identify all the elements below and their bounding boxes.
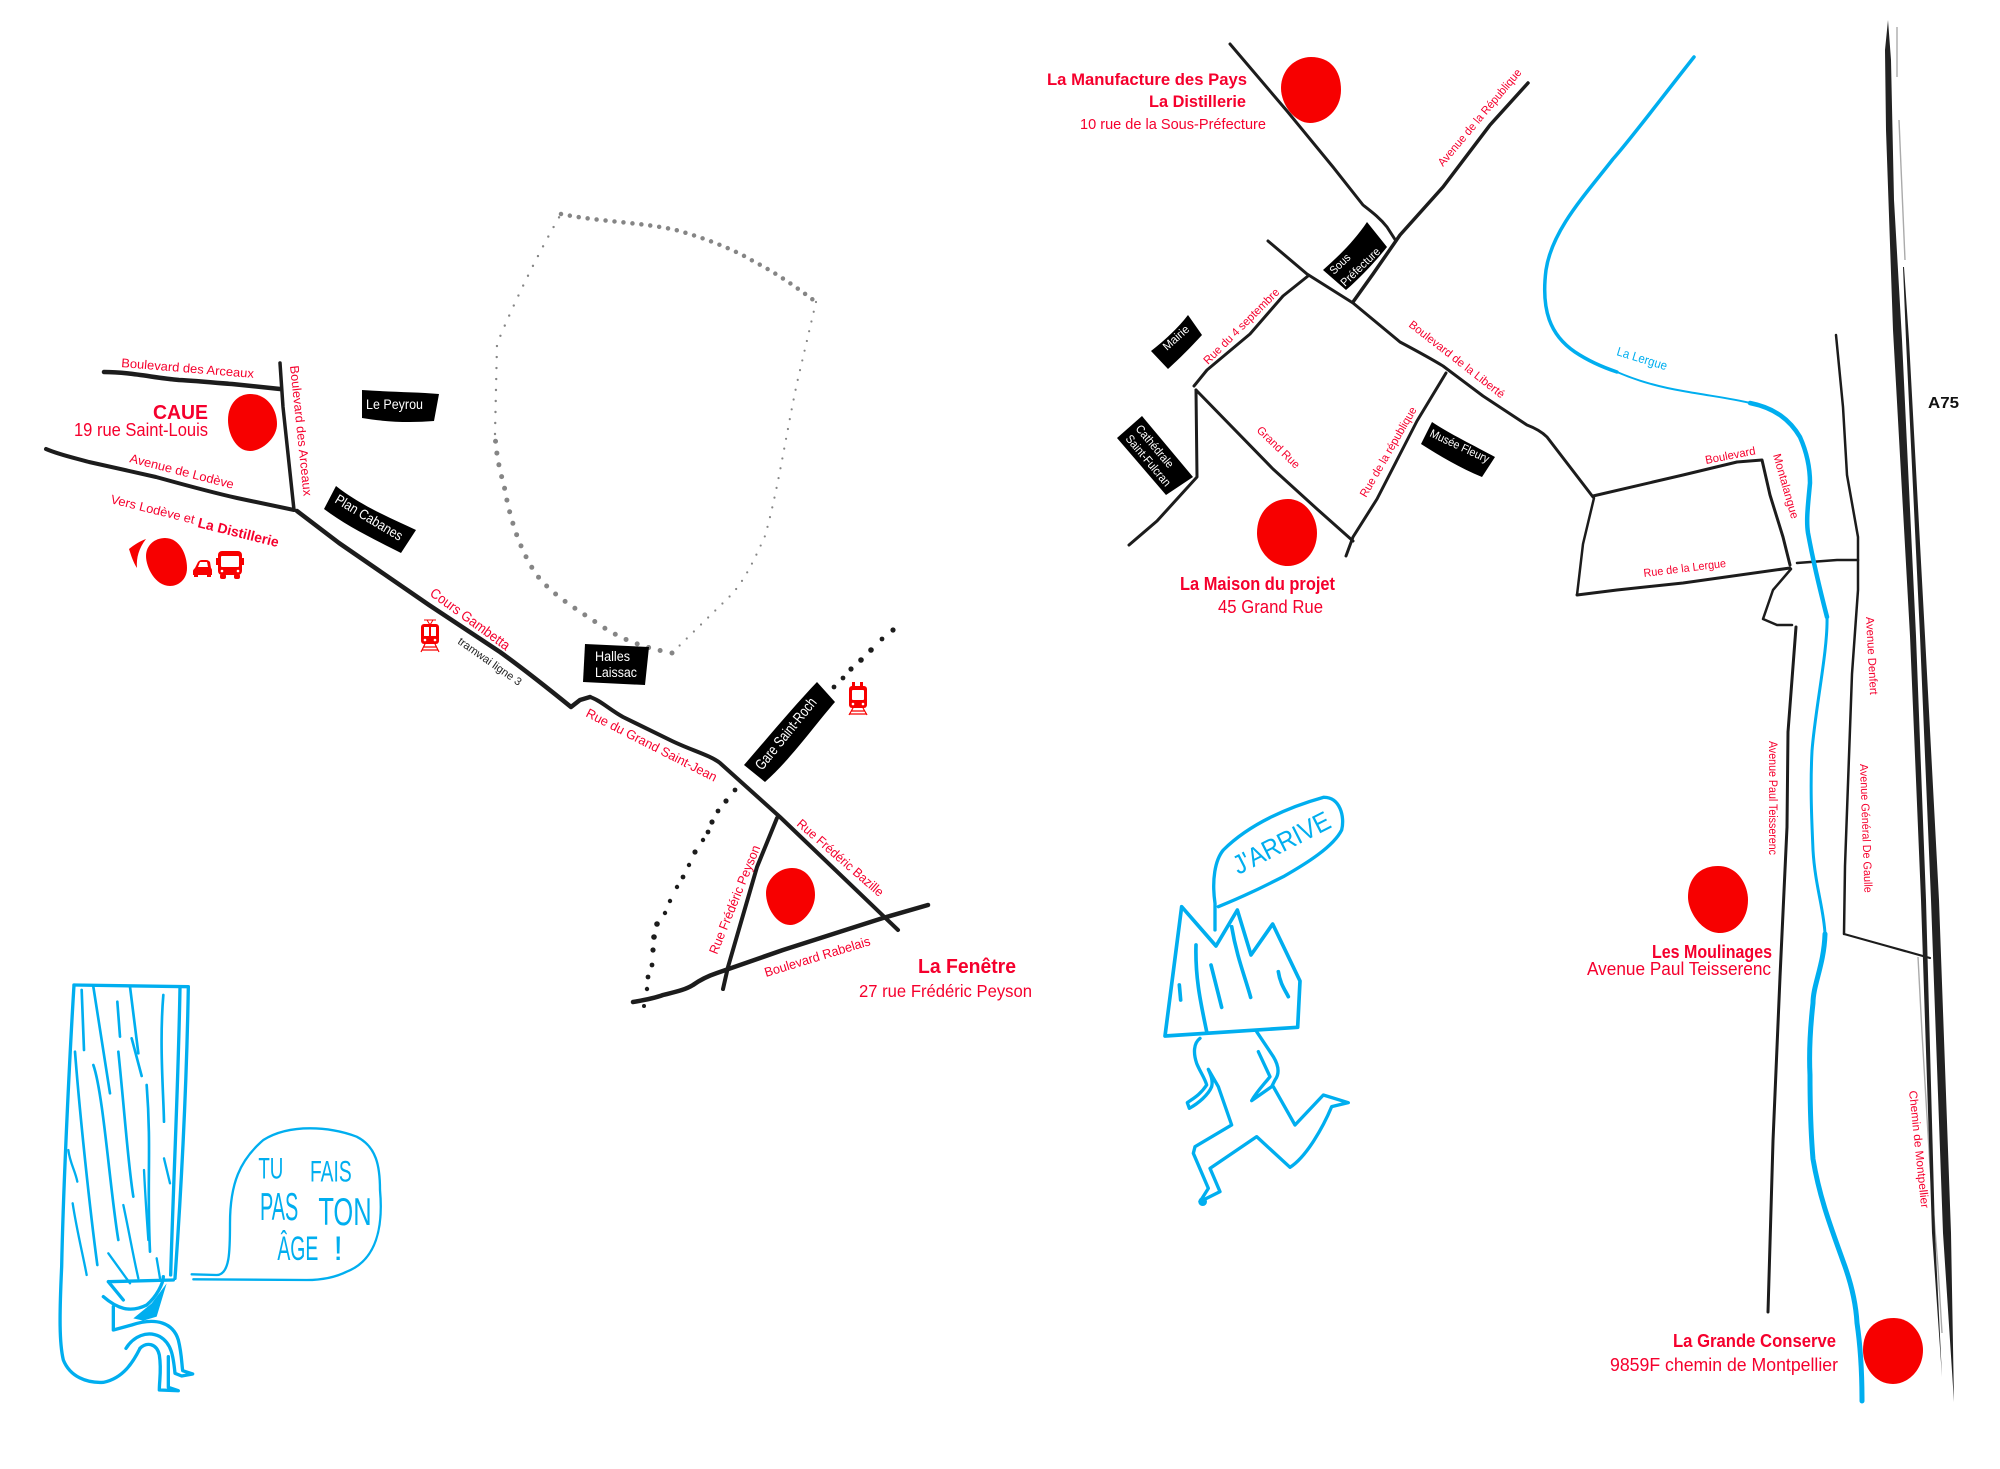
street names: La Distillerie [196, 514, 281, 550]
road: Boulevard Montalangue [1593, 460, 1790, 565]
building worn as a hat [1165, 907, 1300, 1036]
illustration: running figure [1165, 797, 1348, 1206]
motorway name: A75 [1928, 395, 1959, 412]
icon: bus [216, 551, 244, 579]
street names: Boulevard des Arceaux [287, 365, 315, 497]
road: Avenue Paul Teisserenc [1768, 627, 1796, 1312]
address: La Grande Conserve: 9859F chemin de Montpellier [1610, 1355, 1838, 1375]
river: La Lergue [1545, 57, 1862, 1401]
label: Cathédrale Saint-Fulcran [1117, 416, 1193, 495]
panel: map of Montpellier [46, 214, 1032, 1008]
road: A75 western carriageway [1885, 20, 1942, 1377]
street names: Boulevard des Arceaux [121, 356, 255, 381]
icon: car [193, 560, 212, 577]
street names: Boulevard de la Liberté [1406, 319, 1507, 401]
address: La Manufacture des Pays: La Distillerie [1149, 92, 1246, 111]
address: CAUE [74, 402, 208, 440]
street names: Avenue Denfert [1863, 617, 1879, 696]
street names: Rue de la Lergue [1643, 558, 1727, 580]
speech bubble [192, 1128, 381, 1280]
speech bubble [1214, 797, 1343, 930]
road: Boulevard Rabelais [633, 905, 928, 1002]
street names: Grand Rue [1254, 425, 1302, 471]
speech text: ÂGE [277, 1229, 318, 1268]
tram line note: tramwai ligne 3 [455, 636, 524, 688]
label: Gare Saint-Roch: Gare Saint-Roch [752, 694, 820, 774]
marker: La Fenêtre [766, 868, 815, 925]
road: Grand Rue [1196, 390, 1353, 541]
street names: Avenue Général De Gaulle [1857, 764, 1873, 893]
road: Rue de la république [1346, 373, 1446, 556]
street names: Avenue de la République [1436, 67, 1524, 169]
railway line south [642, 788, 737, 1008]
label: Sous-Préfecture: Sous [1328, 252, 1354, 277]
marker: La Distillerie [146, 538, 187, 586]
street names: Cours Gambetta [427, 584, 514, 653]
marker: direction arrow [129, 539, 146, 568]
road: Boulevard de la Liberté [1268, 241, 1593, 497]
road: Boulevard des Arceaux west [104, 372, 280, 389]
address: La Grande Conserve: La Grande Conserve [1673, 1331, 1836, 1351]
address: La Fenêtre: La Fenêtre [918, 956, 1016, 978]
address: Les Moulinages [1587, 942, 1772, 979]
street names: Boulevard Rabelais [762, 933, 873, 980]
street names: Avenue Paul Teisserenc [1766, 741, 1778, 855]
speech text: TU [258, 1152, 283, 1185]
railway line north [832, 627, 896, 689]
speech text: J'ARRIVE [1227, 805, 1336, 880]
address: CAUE: 19 rue Saint-Louis [74, 420, 208, 440]
speech text: TON [318, 1190, 372, 1234]
label: Halles Laissac: Laissac [595, 665, 637, 680]
street names [109, 356, 887, 980]
icon: tram, Gare Saint-Roch [849, 682, 867, 715]
road: Avenue Denfert [1836, 335, 1858, 934]
street names: Rue du Grand Saint-Jean [584, 705, 720, 785]
marker: CAUE [228, 394, 277, 451]
street names: Avenue de Lodève [128, 451, 235, 492]
road: A75 eastern carriageway [1903, 267, 1954, 1402]
road: Avenue de Lodève [46, 449, 294, 510]
label: Mairie: Mairie [1161, 324, 1192, 353]
road: Cours Gambetta [297, 511, 590, 707]
marker: Les Moulinages [1688, 866, 1748, 933]
marker: La Grande Conserve [1863, 1318, 1923, 1384]
speech text: PAS [260, 1185, 298, 1229]
label: Cathédrale Saint-Fulcran: Cathédrale [1133, 422, 1177, 471]
illustration: seated figure under a curtain [60, 985, 381, 1391]
label: Plan Cabanes: Plan Cabanes [332, 491, 406, 544]
label: Le Peyrou: Le Peyrou [366, 397, 423, 412]
street names: Rue Frédéric Peyson [706, 843, 763, 956]
label: Mairie [1151, 315, 1202, 369]
label: Halles Laissac [583, 644, 649, 685]
speech text: FAIS [310, 1156, 352, 1189]
foot [1198, 1197, 1207, 1206]
street names: Boulevard [1704, 445, 1757, 467]
address: La Manufacture des Pays [1047, 70, 1266, 133]
road: Rue du Grand Saint-Jean and Rue Frédéric Bazille [590, 697, 898, 930]
label: Musée Fleury [1421, 422, 1495, 477]
address: La Fenêtre: 27 rue Frédéric Peyson [859, 981, 1032, 1001]
road: Rue du 4 septembre [1194, 276, 1308, 386]
river name: La Lergue [1615, 344, 1669, 373]
road: link to Avenue Denfert [1797, 560, 1858, 563]
running body [1187, 1032, 1348, 1202]
address: La Maison du projet [1180, 574, 1335, 617]
street names: Rue du 4 septembre [1202, 287, 1282, 367]
road: link to Chemin de Montpellier [1844, 934, 1930, 958]
marker: La Manufacture des Pays [1281, 57, 1341, 123]
street names: Rue Frédéric Bazille [794, 816, 887, 899]
road: faint sketch lines [1897, 27, 1942, 1333]
address: La Manufacture des Pays: La Manufacture des Pays [1047, 70, 1247, 89]
address: La Grande Conserve [1610, 1331, 1838, 1375]
speech text: ! [333, 1230, 343, 1268]
address: Les Moulinages: Avenue Paul Teisserenc [1587, 959, 1771, 979]
street names: Montalangue [1770, 453, 1800, 520]
address: La Maison du projet: 45 Grand Rue [1218, 597, 1323, 617]
road: loop west [1577, 498, 1594, 595]
address: La Maison du projet: La Maison du projet [1180, 574, 1335, 594]
label: Sous-Préfecture [1323, 222, 1387, 290]
panel: map of Lodève [1047, 20, 1959, 1402]
road: Rue Frédéric Peyson [723, 818, 777, 989]
label: Sous-Préfecture: Préfecture [1339, 246, 1383, 289]
road: Cathédrale street [1129, 390, 1197, 545]
street names: Rue de la république [1358, 405, 1420, 500]
icon: tram, Cours Gambetta [421, 620, 439, 652]
label: Halles Laissac: Halles [595, 649, 630, 664]
speech text [258, 1152, 372, 1268]
curtain and figure outline [60, 985, 193, 1391]
road: Rue de la Lergue [1577, 568, 1790, 595]
street names: Vers Lodève et [109, 492, 197, 527]
label: Le Peyrou [362, 390, 439, 422]
marker: La Maison du projet [1257, 499, 1317, 566]
address: Les Moulinages: Les Moulinages [1652, 942, 1772, 962]
road: Boulevard des Arceaux [280, 363, 294, 510]
label: Musée Fleury: Musée Fleury [1428, 428, 1491, 466]
figure torso [133, 1283, 167, 1321]
label: Cathédrale Saint-Fulcran: Saint-Fulcran [1123, 432, 1174, 489]
address: La Fenêtre [859, 956, 1032, 1001]
dotted outline: historic centre [495, 214, 816, 653]
road: small bend [1763, 569, 1792, 625]
address: La Manufacture des Pays: 10 rue de la Sous-Préfecture [1080, 116, 1266, 133]
street names [1202, 67, 1930, 1209]
road: Avenue de la République [1353, 83, 1528, 302]
road: north-west street [1230, 44, 1396, 241]
street names: Chemin de Montpellier [1906, 1090, 1930, 1209]
address: CAUE: CAUE [153, 402, 208, 424]
